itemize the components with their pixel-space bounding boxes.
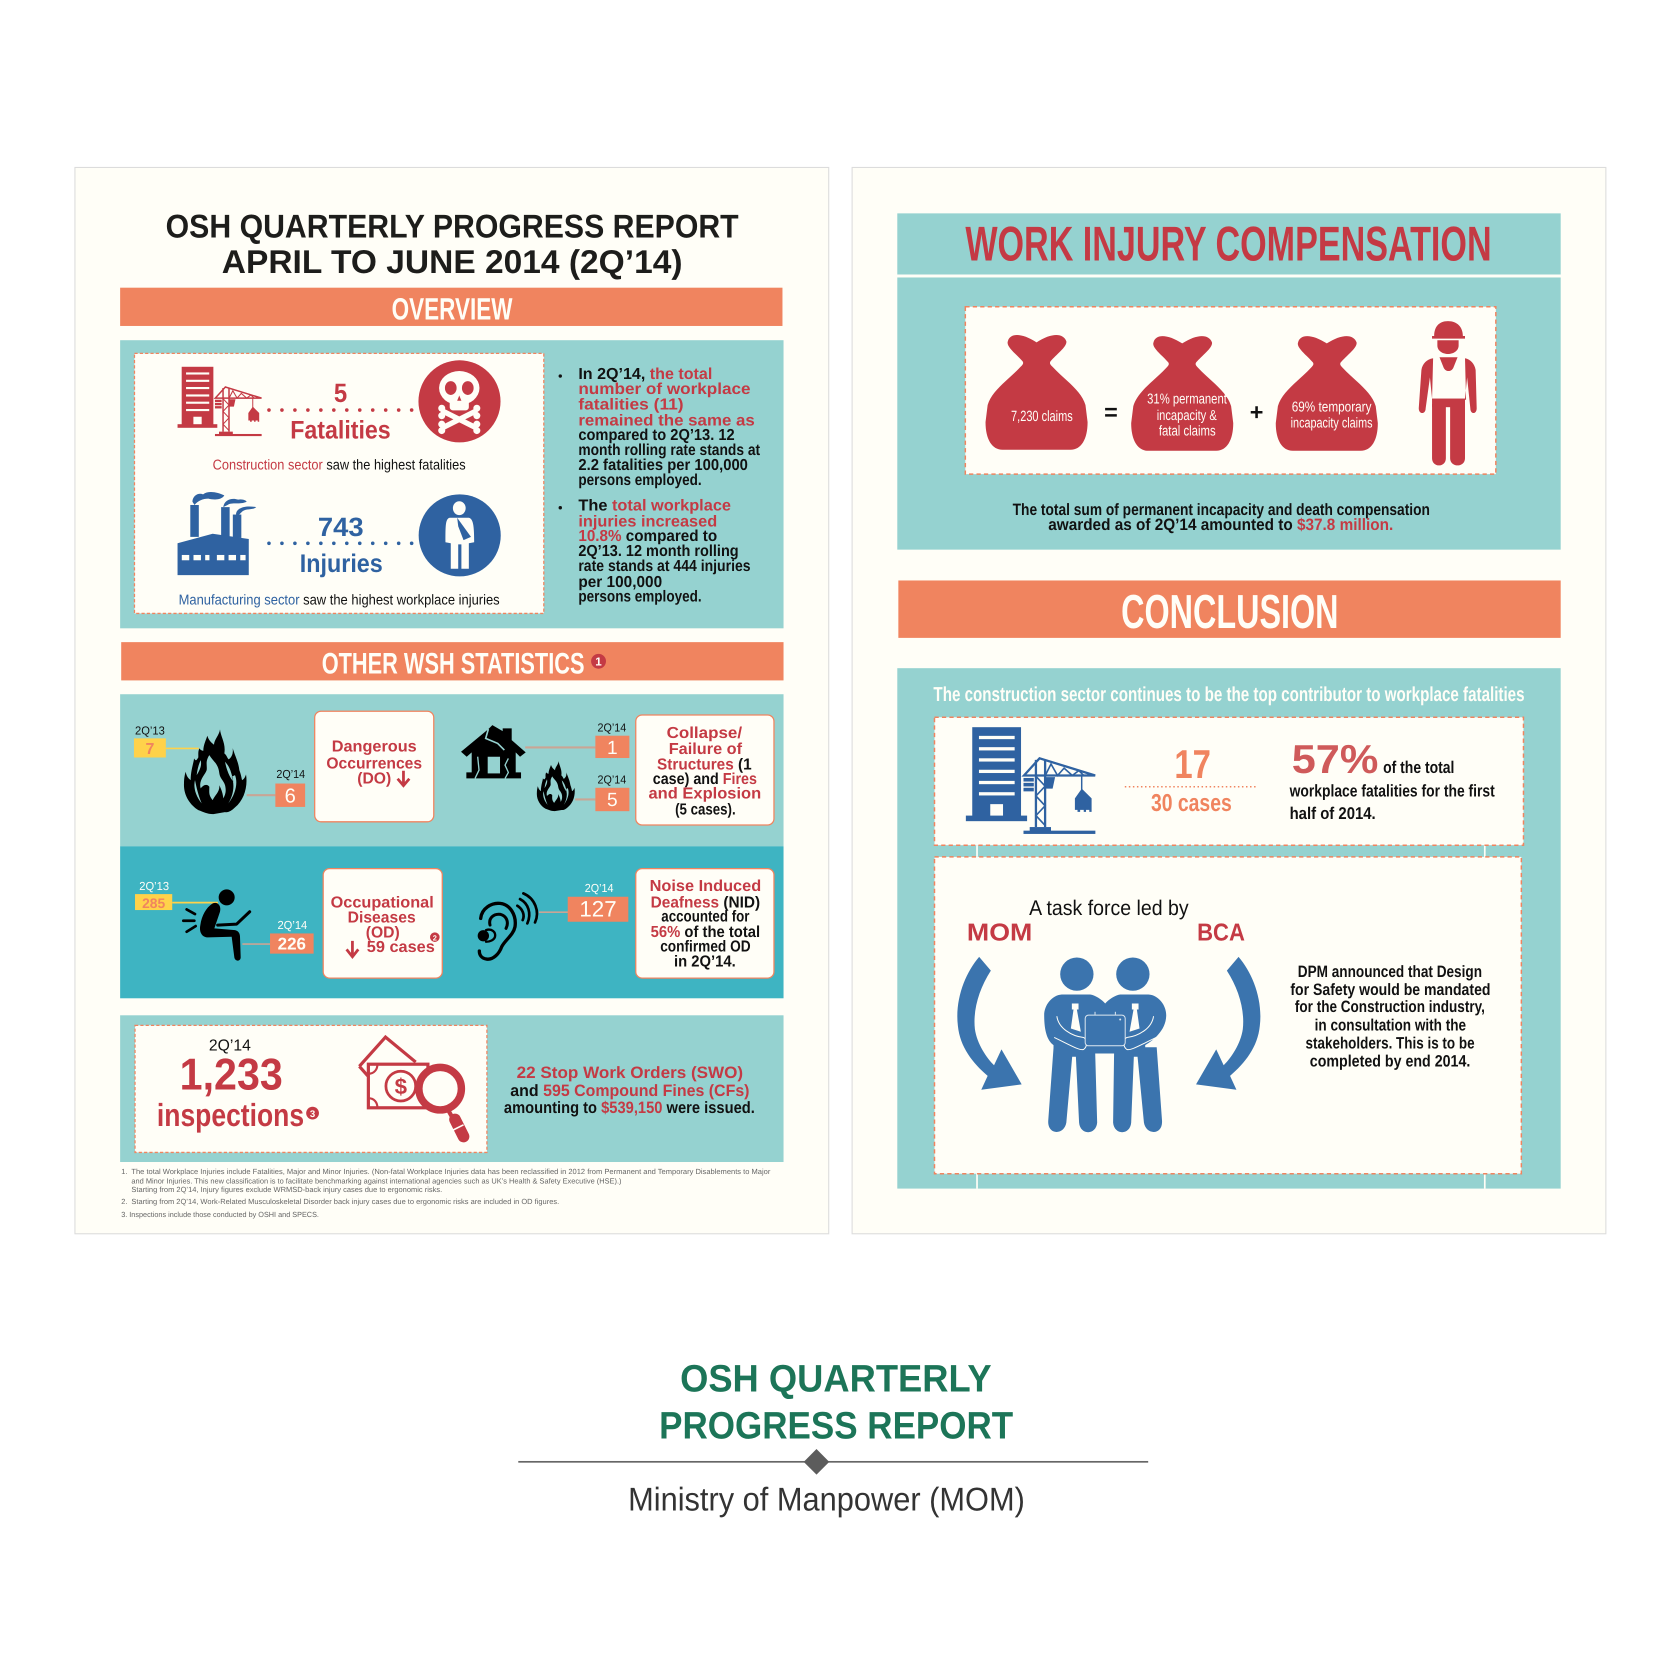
fires value: 5 (607, 789, 618, 810)
footnotes (121, 1168, 771, 1219)
footnotes: 3. Inspections include those conducted by OSHI and SPECS. (121, 1210, 319, 1219)
enforcement text (504, 1064, 755, 1117)
footer source: Ministry of Manpower (MOM) (628, 1481, 1025, 1518)
panel: overview (120, 340, 784, 628)
icon: factory (178, 492, 256, 575)
icon: small flame (537, 761, 575, 811)
collapse value: 1 (607, 737, 618, 758)
inspections card: 1,233 (180, 1049, 283, 1099)
panel: occupational diseases row (120, 846, 784, 998)
money bag: permanent incapacity (1131, 336, 1233, 451)
design for safety text: stakeholders. This is to be (1306, 1034, 1475, 1053)
card: noise induced deafness (636, 869, 774, 978)
OD 2Q13 value (135, 880, 218, 911)
inspections card: inspections (157, 1098, 304, 1133)
money bag: total claims: 7,230 claims (1011, 407, 1073, 424)
overview bullet 2: 10.8% compared to (578, 527, 717, 545)
card: collapse and fires: Structures (1 (657, 756, 752, 774)
fatalities figure: 5 (334, 378, 347, 408)
card: collapse and fires: case) and Fires (653, 770, 757, 788)
OD 2Q14 value (242, 920, 314, 954)
overview bullet 1: In 2Q’14, the total (578, 365, 712, 383)
card: dangerous occurrences: Occurrences (326, 755, 422, 773)
fatalities figure: Fatalities (290, 416, 391, 445)
notches between cards (977, 845, 1485, 1189)
card: occupational diseases: Diseases (348, 909, 416, 927)
card: noise induced deafness: confirmed OD (660, 938, 751, 956)
card: collapse and fires (636, 715, 774, 825)
enforcement text: amounting to $539,150 were issued. (504, 1099, 755, 1117)
icon: blue building and crane (966, 727, 1095, 834)
task force heading: A task force led by (1029, 897, 1189, 920)
overview bullet 2: injuries increased (578, 512, 717, 531)
footer title: OSH QUARTERLY (680, 1357, 992, 1400)
enforcement text: and 595 Compound Fines (CFs) (510, 1082, 750, 1100)
card: occupational diseases: 59 cases (367, 938, 435, 956)
title (166, 208, 739, 281)
card: collapse and fires: (5 cases). (675, 801, 736, 819)
icon: money under magnifying glass: $ (395, 1075, 407, 1099)
card: noise induced deafness: Noise Induced (650, 877, 761, 895)
construction caption: Construction sector saw the highest fatalities (213, 457, 466, 473)
money bag: total claims (986, 335, 1088, 450)
card: collapse and fires: Collapse/ (667, 724, 743, 742)
footer title (659, 1357, 1013, 1447)
panel: compensation (897, 277, 1561, 550)
design for safety text: DPM announced that Design (1298, 963, 1482, 981)
collapse value: 2Q’14 (597, 722, 626, 735)
footnotes: 1. (121, 1169, 127, 1176)
card: occupational diseases: (OD) (366, 924, 400, 942)
design for safety text: completed by end 2014. (1310, 1053, 1470, 1071)
money bag: temporary incapacity: 69% temporary (1292, 399, 1372, 415)
OD 2Q14 value: 226 (278, 936, 306, 954)
compensation sum text (1013, 501, 1430, 534)
heading: overview: OVERVIEW (392, 293, 513, 327)
overview bullet 1: month rolling rate stands at (578, 441, 760, 459)
overview bullet 1 (559, 365, 760, 489)
card: noise induced deafness: accounted for (661, 908, 750, 926)
panel: dangerous occurrences row (120, 694, 784, 846)
inspections card: 3 (310, 1108, 315, 1119)
overview bullet 2: 2Q’13. 12 month rolling (578, 542, 739, 560)
57 percent text: half of 2014. (1290, 805, 1376, 823)
overview bullet 2: rate stands at 444 injuries (578, 557, 751, 575)
DO 2Q14 value: 2Q’14 (276, 769, 305, 781)
panel: conclusion (897, 668, 1561, 1189)
fires value: 2Q’14 (597, 774, 626, 787)
heading: other WSH statistics: 1 (595, 656, 602, 669)
task force heading (967, 897, 1245, 946)
57 percent text: workplace fatalities for the first (1289, 782, 1495, 801)
57 percent text: 57% (1292, 738, 1378, 782)
inspections card: 2Q’14 (209, 1037, 251, 1055)
footnotes: The total Workplace Injuries include Fatalities, Major and Minor Injuries. (Non-fatal Workplace Injuries data has been reclassified in 2012 from Permanent and Temporary Disablements to Major (131, 1168, 771, 1176)
DO 2Q13 value: 2Q’13 (135, 725, 165, 738)
NID value (539, 882, 628, 922)
DO 2Q13 value: 7 (145, 740, 154, 758)
overview bullet 2 (559, 497, 751, 606)
compensation sum text: The total sum of permanent incapacity and death compensation (1013, 501, 1430, 519)
57 percent text: of the total (1383, 759, 1454, 777)
DO 2Q14 value (247, 769, 305, 808)
manufacturing caption: Manufacturing sector saw the highest workplace injuries (179, 592, 500, 608)
card: noise induced deafness: Deafness (NID) (651, 894, 760, 912)
OD 2Q13 value: 2Q’13 (139, 880, 169, 893)
footnotes: Starting from 2Q’14, Injury figures exclude WRMSD-back injury cases due to ergonomic risks. (131, 1185, 442, 1194)
money bag: permanent incapacity: incapacity & (1157, 407, 1217, 423)
overview bullet 1: persons employed. (578, 471, 702, 489)
heading: overview (120, 288, 782, 327)
design for safety text (1290, 963, 1491, 1071)
title: APRIL TO JUNE 2014 (2Q’14) (222, 243, 683, 281)
overview bullet 1: compared to 2Q’13. 12 (578, 426, 735, 444)
NID value: 127 (579, 897, 617, 922)
heading: conclusion: CONCLUSION (1121, 584, 1338, 638)
card: dangerous occurrences: Dangerous (332, 738, 417, 756)
card: occupational diseases (323, 869, 442, 978)
card: occupational diseases: Occupational (331, 894, 434, 912)
footer divider with diamond (518, 1449, 1148, 1475)
arrow: BCA (1196, 957, 1260, 1090)
icon: large flame (184, 729, 247, 814)
card: dangerous occurrences: (DO) (357, 770, 391, 788)
icon: collapsed house (461, 725, 526, 778)
overview bullet 1: number of workplace (578, 380, 751, 398)
injuries figure: Injuries (300, 550, 383, 578)
icon: ear with sound waves (478, 893, 537, 959)
fatalities figure (269, 378, 414, 445)
cases fraction: 30 cases (1151, 789, 1232, 816)
equals sign: = (1104, 399, 1118, 425)
overview stats card (134, 353, 544, 613)
card: collapse and fires: Failure of (669, 740, 743, 758)
heading: other WSH statistics (121, 642, 784, 680)
OD 2Q14 value: 2Q’14 (277, 920, 307, 932)
card: collapse and fires: and Explosion (649, 785, 761, 803)
panel: inspections (120, 1015, 784, 1162)
panel: right report page (852, 167, 1606, 1234)
cases fraction: 17 (1174, 743, 1211, 788)
money bag: permanent incapacity: fatal claims (1159, 423, 1216, 439)
icon: construction building and crane (178, 367, 262, 436)
overview bullet 2: persons employed. (578, 588, 702, 606)
compensation sum text: awarded as of 2Q’14 amounted to $37.8 million. (1048, 516, 1393, 534)
overview bullet 1: fatalities (11) (578, 395, 684, 414)
cases fraction (1125, 743, 1257, 816)
overview bullet 1: remained the same as (578, 411, 755, 430)
overview bullet 2: The total workplace (578, 497, 731, 515)
money bag: temporary incapacity: incapacity claims (1291, 415, 1373, 431)
card: occupational diseases: 2 (433, 935, 437, 942)
footnotes: Starting from 2Q’14, Work-Related Musculoskeletal Disorder back injury cases due to ergonomic risks are included in OD figures. (131, 1198, 559, 1206)
DO 2Q13 value (134, 725, 199, 758)
icon: construction worker (1419, 321, 1477, 465)
collapse value (525, 722, 629, 758)
icon: money under magnifying glass (359, 1037, 464, 1136)
arrow: MOM (957, 957, 1022, 1090)
icon: skull and crossbones (418, 360, 501, 442)
card: noise induced deafness: 56% of the total (651, 923, 760, 941)
task force heading: BCA (1197, 918, 1245, 946)
card: noise induced deafness: in 2Q’14. (674, 953, 736, 971)
title: OSH QUARTERLY PROGRESS REPORT (166, 208, 739, 245)
icon: seated worker in pain (183, 889, 250, 961)
money bag: temporary incapacity (1276, 336, 1378, 451)
card: construction cases (934, 717, 1523, 845)
plus sign: + (1250, 399, 1263, 425)
card: task force (934, 857, 1521, 1174)
icon: injured worker (419, 494, 501, 576)
panel: left report page (75, 167, 829, 1234)
injuries figure: 743 (318, 512, 364, 542)
footer title: PROGRESS REPORT (659, 1403, 1013, 1447)
NID value: 2Q’14 (585, 882, 613, 895)
inspections card (135, 1025, 487, 1152)
enforcement text: 22 Stop Work Orders (SWO) (517, 1064, 743, 1082)
task force heading: MOM (967, 918, 1032, 946)
money bag: permanent incapacity: 31% permanent (1147, 391, 1227, 407)
overview bullet 2: per 100,000 (578, 573, 662, 591)
57 percent text (1289, 738, 1495, 823)
design for safety text: in consultation with the (1315, 1017, 1466, 1035)
design for safety text: for Safety would be mandated (1290, 981, 1491, 999)
design for safety text: for the Construction industry, (1295, 998, 1485, 1016)
card: dangerous occurrences (315, 711, 434, 822)
footnotes: 2. (121, 1199, 127, 1206)
icon: two workers with tablet (1044, 957, 1166, 1132)
fires value (575, 774, 629, 811)
claims equation card (965, 307, 1496, 474)
footnotes: and Minor Injuries. This new classification is to facilitate benchmarking against international agencies such as UK’s Health & Safety Executive (HSE).) (131, 1177, 622, 1185)
injuries figure (269, 512, 414, 578)
overview bullet 1: 2.2 fatalities per 100,000 (578, 456, 748, 474)
OD 2Q13 value: 285 (142, 895, 165, 911)
heading: conclusion (898, 580, 1561, 638)
heading: other WSH statistics: OTHER WSH STATISTICS (322, 647, 585, 680)
DO 2Q14 value: 6 (285, 786, 296, 808)
